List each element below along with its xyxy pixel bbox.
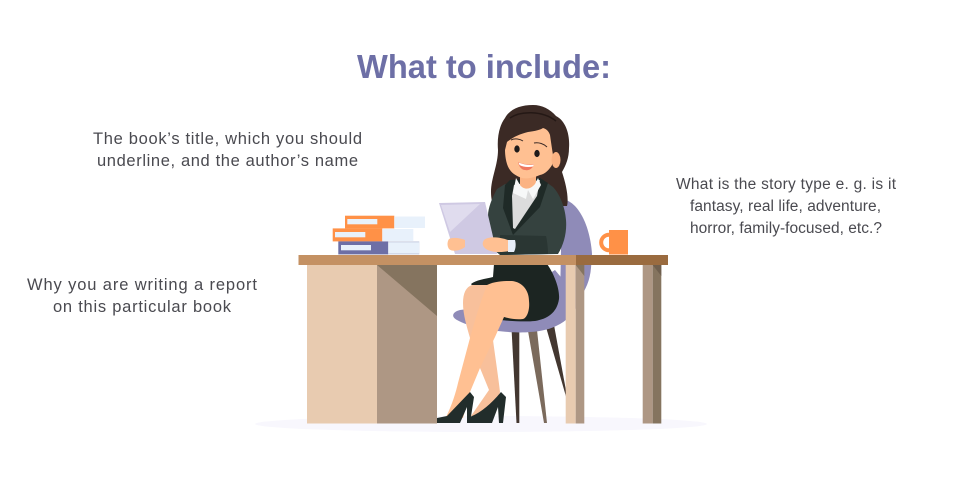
ear (552, 152, 560, 168)
back leg (463, 285, 510, 418)
hair band shadow (510, 113, 556, 121)
mouth (518, 162, 534, 170)
middle book (333, 228, 413, 241)
desk (298, 255, 668, 424)
title: What to include: (357, 48, 611, 85)
bottom book (338, 241, 419, 254)
text block: story type: What is the story type e. g. is it (676, 176, 897, 193)
mug body (609, 230, 628, 254)
books stack (333, 216, 425, 254)
text block: why this book: Why you are writing a report (27, 276, 257, 294)
chair seat (453, 270, 580, 332)
top book (345, 216, 425, 228)
shirt (512, 180, 540, 229)
text block: book title and author: The book’s title, which you should (93, 130, 362, 148)
face (505, 128, 553, 178)
neck (520, 170, 536, 189)
mug handle (601, 235, 617, 250)
chair back (560, 199, 592, 300)
right leg (643, 265, 653, 424)
hair back (491, 105, 569, 206)
left hand (448, 238, 465, 251)
tablet (439, 202, 497, 254)
tablet glare (441, 204, 480, 232)
chair (453, 199, 592, 423)
text block: story type (676, 176, 897, 237)
right hand (483, 237, 509, 252)
text block: why this book: on this particular book (53, 298, 232, 316)
cuff (508, 240, 516, 252)
legs (437, 264, 559, 423)
text block: why this book (27, 276, 257, 316)
jacket shade (500, 235, 548, 255)
front leg (446, 281, 529, 418)
text block: book title and author: underline, and the author’s name (97, 152, 358, 170)
text block: story type: horror, family-focused, etc.? (690, 220, 882, 237)
teeth (518, 162, 534, 167)
jacket (482, 182, 566, 255)
desk top (298, 255, 576, 265)
mug (601, 230, 628, 254)
back shoe (467, 392, 506, 423)
chair legs (512, 325, 567, 423)
text block: story type: fantasy, real life, adventure, (690, 198, 881, 215)
collar (513, 178, 541, 199)
skirt (471, 264, 559, 321)
text block: book title and author (93, 130, 362, 170)
middle leg (566, 265, 576, 424)
lapels (503, 178, 548, 235)
eyebrows (511, 139, 547, 147)
desk left panel (307, 265, 377, 424)
tablet and hands (439, 202, 516, 254)
eyes (514, 145, 540, 157)
floor shadow (255, 416, 707, 432)
woman (437, 105, 569, 423)
front shoe (437, 392, 474, 423)
